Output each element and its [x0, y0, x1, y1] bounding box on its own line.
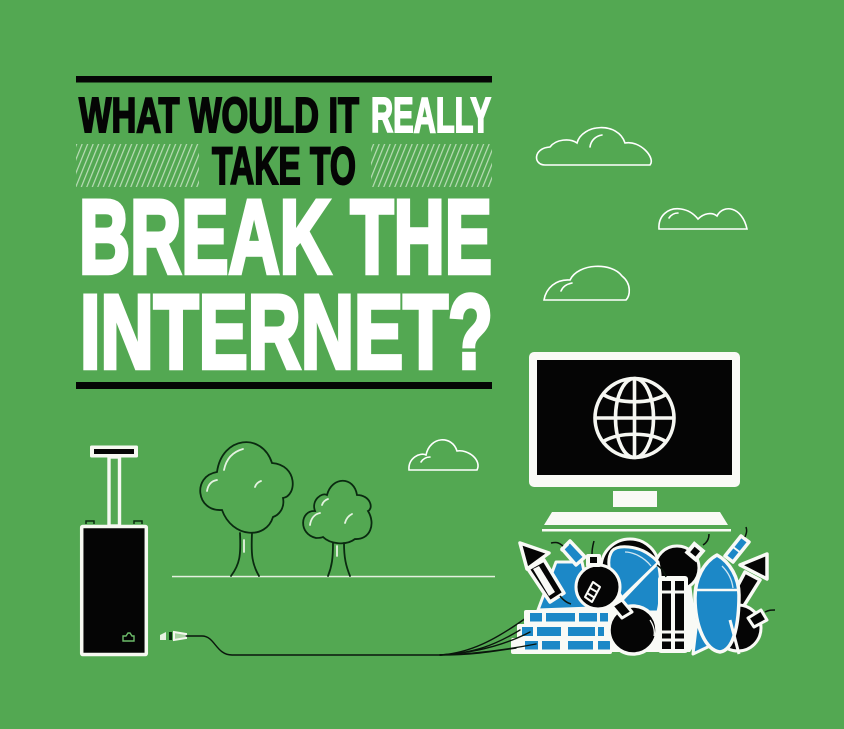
plunger handle	[90, 446, 138, 458]
bomb right	[715, 605, 775, 651]
plug prong	[160, 632, 166, 640]
small tree	[303, 481, 372, 576]
left rocket	[520, 543, 571, 604]
cable and plug	[160, 618, 526, 655]
back bomb centre	[601, 539, 659, 597]
title block	[76, 76, 493, 391]
hatch panel right	[371, 144, 492, 187]
plunger shaft	[109, 457, 120, 526]
computer monitor	[529, 352, 740, 532]
globe icon	[595, 378, 674, 458]
stack wires	[440, 630, 536, 655]
cloud 2	[659, 209, 747, 229]
back bomb right	[655, 534, 709, 590]
cloud 3	[544, 266, 629, 300]
title line: BREAK THE: BREAK THE	[79, 179, 492, 296]
dynamite bundle	[657, 565, 688, 653]
base line	[542, 529, 731, 532]
cloud 4	[409, 440, 478, 470]
white backing of pile	[545, 562, 698, 652]
hatch panel left	[76, 144, 199, 187]
detonator plunger	[82, 446, 146, 654]
large tree	[200, 442, 293, 576]
blue rocket	[693, 555, 739, 654]
title line: TAKE TO: TAKE TO	[212, 137, 356, 196]
blue shell behind	[538, 562, 592, 610]
plug body	[174, 632, 186, 640]
title word: REALLY: REALLY	[371, 89, 491, 143]
monitor bezel	[529, 352, 740, 487]
blue stick top left	[551, 541, 585, 565]
blue stick top right	[725, 527, 749, 562]
box socket icon	[123, 633, 134, 641]
terminals	[86, 521, 142, 524]
cloud 1	[537, 128, 651, 165]
title line: WHAT WOULD IT: WHAT WOULD IT	[79, 89, 359, 143]
weapons pile	[440, 527, 775, 655]
title line: INTERNET?: INTERNET?	[80, 274, 493, 391]
monitor base	[544, 512, 728, 525]
top rule	[76, 76, 492, 82]
monitor screen	[537, 360, 732, 475]
bomb centre left	[576, 541, 620, 609]
monitor stand	[613, 491, 657, 507]
bottom rule	[76, 382, 492, 389]
ground line	[172, 576, 495, 577]
detonator box	[82, 526, 146, 654]
blue sticks stack	[511, 610, 612, 654]
cable wires	[186, 618, 526, 655]
right rocket	[728, 554, 767, 612]
bomb front	[609, 600, 657, 654]
blue diagonal shell	[609, 547, 661, 612]
